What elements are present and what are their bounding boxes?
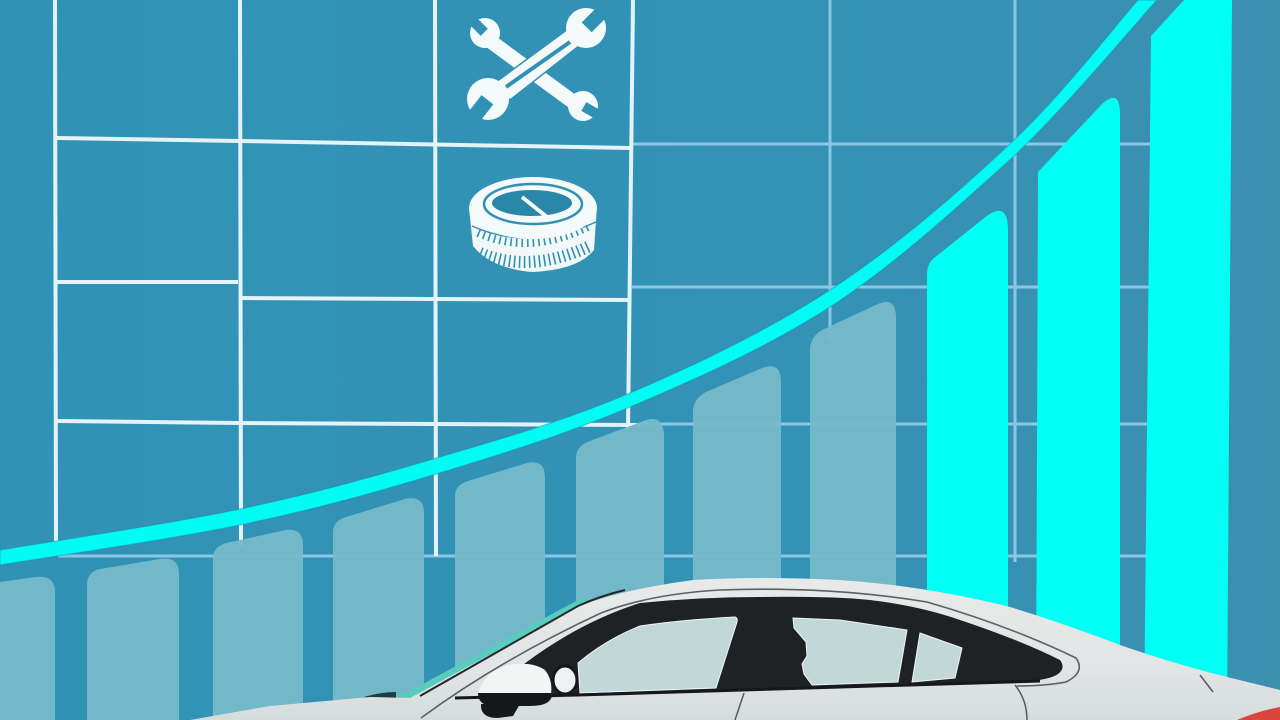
side mirror: [478, 664, 551, 694]
wrench slot: [506, 42, 570, 87]
bar 9: [927, 211, 1008, 720]
bar chart: muted bars: [0, 302, 896, 720]
window frame: [524, 597, 1063, 696]
wrench front: [466, 5, 609, 124]
trend curve: [0, 0, 1157, 565]
bar 1: [0, 577, 55, 720]
wiper: [364, 692, 396, 699]
bar chart: highlighted bars: [927, 0, 1232, 720]
bar 5: [455, 462, 545, 720]
tire rim: [484, 184, 582, 224]
mirror base: [478, 693, 552, 706]
car body: [190, 578, 1280, 720]
windshield seal: [420, 590, 625, 696]
mirror glass: [553, 666, 577, 694]
bar 4: [333, 498, 424, 720]
wrench back: [469, 17, 603, 121]
sill line: [455, 681, 1040, 698]
hub highlight: [522, 197, 547, 217]
tire hub: [491, 189, 573, 217]
chrome line: [421, 589, 1079, 718]
bar 8: [810, 302, 896, 720]
bar 7: [693, 366, 781, 720]
tail light: [1237, 707, 1280, 720]
bar 6: [576, 419, 664, 720]
grid: [55, 0, 1150, 562]
tire top: [469, 177, 597, 239]
car: [190, 578, 1280, 720]
icon: tire: [469, 177, 597, 272]
tire tread: [469, 206, 597, 272]
bar 10: [1036, 98, 1120, 720]
door seams: [735, 675, 1213, 720]
front window: [578, 617, 737, 693]
quarter window: [912, 633, 962, 682]
bar 11: [1144, 0, 1232, 720]
mirror arm: [481, 704, 520, 718]
bar 2: [87, 559, 179, 720]
bar 3: [213, 530, 303, 720]
windshield edge: [397, 598, 594, 699]
tread marks: [472, 222, 596, 262]
rear window: [793, 618, 907, 685]
icon: crossed wrenches: [466, 5, 609, 124]
